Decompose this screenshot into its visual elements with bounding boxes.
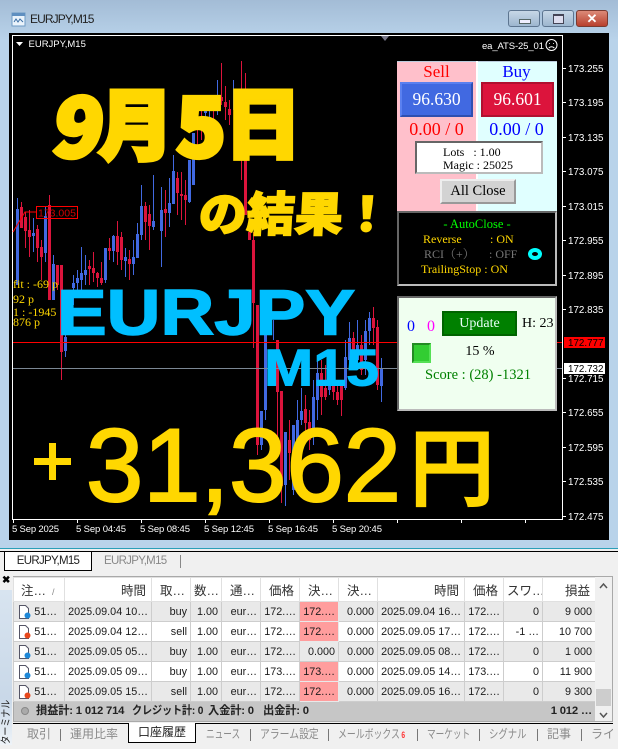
scroll thumb xyxy=(596,689,611,706)
row 5: 9 300 xyxy=(565,686,592,698)
percent: 15 % xyxy=(465,344,495,359)
row 4: 173.… xyxy=(264,666,296,678)
sell column xyxy=(397,61,476,211)
row 5: 0.000 xyxy=(347,686,374,698)
time axis labels: 5 Sep 12:45 xyxy=(204,524,254,535)
score: Score : (28) -1321 xyxy=(425,367,531,383)
headline: date: 9 xyxy=(47,63,113,181)
row 2: 172.… xyxy=(264,626,296,638)
panel: sell and buy xyxy=(397,61,557,211)
row 2: 0.000 xyxy=(347,626,374,638)
row 4: 51… xyxy=(34,666,57,678)
row 4: buy xyxy=(170,666,187,678)
tab: articles: 記事 xyxy=(547,727,571,741)
active tab xyxy=(128,723,196,743)
table frame xyxy=(13,576,613,722)
row 3: 1 000 xyxy=(565,646,592,658)
current price lines xyxy=(13,342,562,368)
row 2: 2025.09.05 17… xyxy=(381,626,461,638)
row 3: 1.00 xyxy=(197,646,218,658)
row 3: 172.… xyxy=(264,646,296,658)
summary row xyxy=(14,702,595,721)
table header: 決… xyxy=(347,584,372,598)
price axis labels: 173.195 xyxy=(568,98,604,109)
sell price button xyxy=(400,82,473,117)
candlesticks xyxy=(18,61,382,506)
panel: update xyxy=(397,296,557,411)
chart tab: active xyxy=(4,552,92,571)
symbol EURJPY: EURJPY xyxy=(57,276,355,348)
tab: alerts: アラーム設定 xyxy=(260,727,319,741)
trailing stop setting: TrailingStop : ON xyxy=(421,262,508,276)
headline: date: 日 xyxy=(225,64,301,174)
row 1: 0 xyxy=(533,606,539,618)
price axis labels: 172.835 xyxy=(568,305,604,316)
summary icon xyxy=(21,707,29,715)
row 2 xyxy=(14,622,595,641)
row 2: sell xyxy=(171,626,187,638)
lots and magic box xyxy=(415,141,543,174)
table header: 価格 xyxy=(269,584,294,598)
summary: credit total: クレジット計: 0 xyxy=(132,705,203,717)
summary: withdrawal total: 出金計: 0 xyxy=(263,705,309,717)
row 4: 1.00 xyxy=(197,666,218,678)
row 1: 1.00 xyxy=(197,606,218,618)
profit amount: 31,362 xyxy=(86,408,401,524)
sell position: 0.00 / 0 xyxy=(409,119,464,139)
yellow account text xyxy=(13,277,58,329)
row 5: sell xyxy=(171,686,187,698)
buy price button xyxy=(481,82,554,117)
price axis labels: 172.715 xyxy=(568,374,604,385)
row 1: 2025.09.04 16… xyxy=(381,606,461,618)
headline: date xyxy=(47,63,301,181)
buy price button: 96.601 xyxy=(493,89,542,109)
shift marker xyxy=(381,36,389,41)
active tab: 口座履歴 xyxy=(138,725,186,739)
maximize button xyxy=(542,10,574,27)
row 2: eur… xyxy=(231,626,257,638)
table header: 通… xyxy=(230,584,255,598)
summary: profit total: 損益計: 1 012 714 xyxy=(36,705,124,717)
row 5: 172.… xyxy=(303,686,335,698)
row 4: 11 900 xyxy=(560,666,592,678)
row 1 xyxy=(19,602,592,621)
row 3: 51… xyxy=(34,646,57,658)
EA name: ea_ATS-25_01 xyxy=(482,41,544,52)
row 5: 51… xyxy=(34,686,57,698)
profit amount xyxy=(34,399,495,524)
green square xyxy=(412,343,431,363)
price axis labels xyxy=(562,64,604,523)
tab: signals: シグナル xyxy=(489,727,526,741)
chart tab: inactive: EURJPY,M15 xyxy=(104,555,166,567)
tab: news: ニュース xyxy=(206,727,240,741)
row 3: 2025.09.05 05… xyxy=(68,646,148,658)
window frame xyxy=(0,0,618,549)
row 3: 0 xyxy=(533,646,539,658)
scrollbar xyxy=(595,577,612,721)
row 4: 0 xyxy=(533,666,539,678)
red price marker 173.005: 173.005 xyxy=(38,208,76,220)
update button xyxy=(442,311,517,336)
all close button: All Close xyxy=(450,183,506,199)
red price marker 173.005 xyxy=(13,206,78,232)
price axis labels: 172.535 xyxy=(568,477,604,488)
tab: market: マーケット xyxy=(427,727,470,741)
price axis labels: 172.895 xyxy=(568,271,604,282)
row 1: 172.… xyxy=(303,606,335,618)
row 2: 172.… xyxy=(303,626,335,638)
blue counter: 0 xyxy=(407,318,415,335)
tab: mailbox: メールボックス6 xyxy=(338,727,405,741)
sell price button: 96.630 xyxy=(412,89,461,109)
close button: ✕ xyxy=(587,11,597,26)
summary: deposit total: 入金計: 0 xyxy=(208,705,254,717)
table header xyxy=(14,578,595,701)
row 4: 2025.09.05 14… xyxy=(381,666,461,678)
row 5: 172.… xyxy=(468,686,500,698)
table header: 価格 xyxy=(473,584,498,598)
row 2: 2025.09.04 12… xyxy=(68,626,148,638)
row 3: 172.… xyxy=(468,646,500,658)
terminal side bar xyxy=(0,590,12,745)
price axis labels: 173.255 xyxy=(568,64,604,75)
time axis labels xyxy=(12,519,526,535)
row 2: 10 700 xyxy=(559,626,592,638)
row 1: 2025.09.04 10… xyxy=(68,606,148,618)
close cross: ✖ xyxy=(2,575,10,586)
row 2: 172.… xyxy=(468,626,500,638)
chart tab: active: EURJPY,M15 xyxy=(17,555,79,567)
hour value: H: 23 xyxy=(522,316,554,331)
row 5: 1.00 xyxy=(197,686,218,698)
yellow account text: fit : -69 p xyxy=(13,277,58,291)
yellow account text: 876 p xyxy=(13,315,40,329)
row 5: 2025.09.05 15… xyxy=(68,686,148,698)
price axis labels: 172.595 xyxy=(568,443,604,454)
scroll up arrow xyxy=(600,583,608,588)
table header: 決… xyxy=(308,584,333,598)
price tag: last: 172.732 xyxy=(568,364,603,375)
row 3 xyxy=(19,645,592,659)
row 5: 172.… xyxy=(264,686,296,698)
price tag: bid: 172.777 xyxy=(568,338,603,349)
price axis labels: 172.655 xyxy=(568,408,604,419)
yellow account text: 1 : -1945 xyxy=(13,305,56,319)
update button: Update xyxy=(459,316,500,331)
price axis labels: 172.955 xyxy=(568,236,604,247)
row 1: 0.000 xyxy=(347,606,374,618)
row 2: 1.00 xyxy=(197,626,218,638)
table header: 取… xyxy=(160,584,185,598)
tab separators xyxy=(60,729,582,741)
buy label: Buy xyxy=(502,62,531,81)
row 3: 0.000 xyxy=(308,646,335,658)
price axis labels: 172.475 xyxy=(568,512,604,523)
row 3: 2025.09.05 08… xyxy=(381,646,461,658)
tab: exposure: 運用比率 xyxy=(70,727,118,741)
tab: trades: 取引 xyxy=(27,727,51,741)
all close button xyxy=(440,179,516,204)
row 4: 173.… xyxy=(468,666,500,678)
table header: 時間 xyxy=(121,584,146,598)
chart symbol label: EURJPY,M15 xyxy=(28,39,86,50)
title bar icon xyxy=(12,12,26,26)
row 4 xyxy=(14,662,595,681)
row 4: eur… xyxy=(231,666,257,678)
row 5: eur… xyxy=(231,686,257,698)
summary profit: 1 012 … xyxy=(551,705,592,717)
scroll down arrow xyxy=(600,712,608,718)
headline: result: の結果！ xyxy=(197,176,393,245)
terminal top rule xyxy=(0,551,618,552)
rci setting: RCI（+） xyxy=(424,247,475,261)
buy column xyxy=(478,61,557,211)
row 1: buy xyxy=(170,606,187,618)
panel: auto close: : OFF xyxy=(489,247,517,261)
row 4: 173.… xyxy=(303,666,335,678)
reverse setting: Reverse xyxy=(423,232,462,246)
table header: 数… xyxy=(194,584,219,598)
buy position: 0.00 / 0 xyxy=(489,119,544,139)
panel: auto close: : ON xyxy=(490,232,514,246)
table header: 損益 xyxy=(565,584,590,598)
terminal label: ターミナル xyxy=(0,700,12,744)
timeframe M15: M15 xyxy=(264,340,379,398)
lots and magic box: Lots : 1.00 Magic : 25025 xyxy=(443,145,513,172)
chart window xyxy=(9,33,609,540)
row 3: 0.000 xyxy=(347,646,374,658)
status ring xyxy=(528,248,542,260)
row 5: 2025.09.05 16… xyxy=(381,686,461,698)
reverse setting xyxy=(423,232,514,246)
table header: 時間 xyxy=(434,584,459,598)
row 3: eur… xyxy=(231,646,257,658)
trade history table xyxy=(13,577,595,702)
time axis labels: 5 Sep 20:45 xyxy=(332,524,382,535)
row 2: -1 … xyxy=(516,626,539,638)
headline: date: 月 xyxy=(99,65,173,175)
tab separator xyxy=(180,555,181,568)
sell label: Sell xyxy=(423,62,450,81)
row 2: 51… xyxy=(34,626,57,638)
window title: EURJPY,M15 xyxy=(30,12,93,26)
minimize button xyxy=(508,10,540,27)
time axis labels: 5 Sep 08:45 xyxy=(140,524,190,535)
auto close heading: - AutoClose - xyxy=(443,217,511,231)
headline: date: 5 xyxy=(176,65,226,181)
row 5: 0 xyxy=(533,686,539,698)
time axis labels: 5 Sep 04:45 xyxy=(76,524,126,535)
bottom tab rule xyxy=(13,723,613,724)
row 1: 51… xyxy=(34,606,57,618)
row 3: buy xyxy=(170,646,187,658)
row 4: 0.000 xyxy=(347,666,374,678)
row 1: 172.… xyxy=(468,606,500,618)
row 5 xyxy=(19,682,592,701)
magenta counter: 0 xyxy=(427,318,435,335)
panel: auto close xyxy=(397,211,557,286)
profit amount: 円 xyxy=(409,399,495,524)
row 1: 172.… xyxy=(264,606,296,618)
row 1: 9 000 xyxy=(565,606,592,618)
time axis labels: 5 Sep 2025 xyxy=(12,524,59,535)
price axis labels: 173.075 xyxy=(568,167,604,178)
yellow account text: 92 p xyxy=(13,292,34,306)
price axis labels: 173.015 xyxy=(568,202,604,213)
price axis labels: 173.135 xyxy=(568,133,604,144)
close button xyxy=(576,10,608,27)
rci setting xyxy=(424,247,517,261)
table header: 注… / xyxy=(21,584,54,598)
row 4: 2025.09.05 09… xyxy=(68,666,148,678)
time axis labels: 5 Sep 16:45 xyxy=(268,524,318,535)
row 1: eur… xyxy=(231,606,257,618)
